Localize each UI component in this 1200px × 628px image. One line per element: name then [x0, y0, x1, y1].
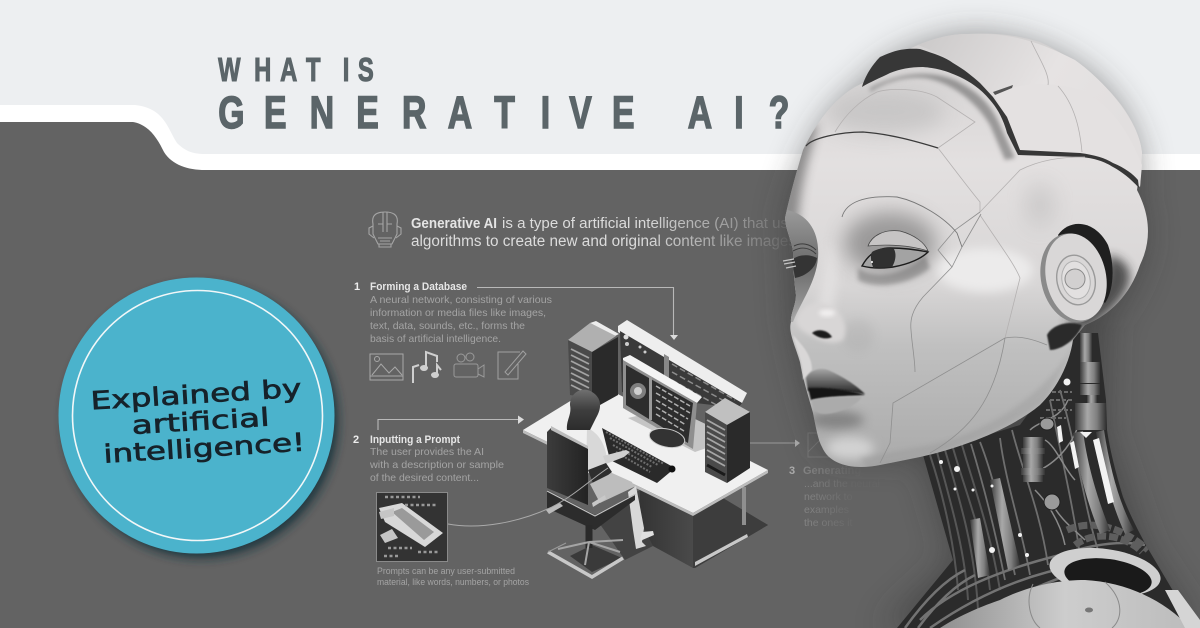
person hair: [567, 390, 600, 430]
chair base legs: [558, 540, 623, 565]
temple highlight: [937, 248, 1033, 292]
lower ear: [1047, 323, 1082, 350]
person: [567, 390, 654, 549]
keyboard: [602, 428, 676, 483]
mouth shade: [808, 411, 864, 429]
chair armrest: [546, 503, 563, 514]
nostril: [812, 330, 832, 338]
step 1: forming a database: [354, 281, 678, 383]
groove soft shadow: [870, 74, 1015, 160]
office chair: [546, 426, 636, 577]
back of head shade: [1065, 255, 1130, 330]
icon: video camera: [454, 353, 484, 377]
cap slit: [993, 85, 1013, 95]
desk top: [523, 384, 768, 513]
chair mat: [548, 552, 623, 577]
robot figure: [780, 34, 1200, 628]
shoulder plate: [940, 580, 1190, 628]
ear disc: [1032, 227, 1114, 329]
nose highlight: [819, 310, 835, 316]
intro text: is a type of artificial intelligence (AI) that uses: [502, 215, 804, 232]
callout line: thumbnail to keyboard: [448, 468, 608, 526]
badge text: artificial: [131, 403, 270, 440]
cap lower panel: [993, 84, 1142, 187]
step 2 description: with a description or sample: [369, 459, 504, 471]
person shirt: [586, 428, 607, 478]
top skull cap: [918, 34, 1142, 187]
large rear monitor: [618, 320, 747, 408]
desk leg: [742, 487, 746, 525]
step 2 number: 2: [353, 434, 359, 446]
desk pedestal: [640, 486, 693, 568]
nose body: [796, 303, 845, 343]
step 3 number: 3: [789, 465, 795, 477]
callout badge: [58, 278, 338, 558]
head base: [785, 34, 1148, 467]
left eye: [783, 244, 817, 278]
step 3 text: [803, 465, 880, 529]
thumbnail: keyboard close-up: [376, 492, 448, 562]
arrow: tower to step 3: [737, 440, 800, 447]
person skirt: [588, 463, 612, 486]
person lap: [590, 473, 634, 503]
person leg: [628, 486, 646, 549]
icon: music notes: [413, 352, 441, 383]
temple shade: [1025, 186, 1055, 224]
step 3 text: Generating: [803, 465, 861, 477]
step 3 text: the ones it: [804, 517, 853, 529]
robot neck mechanics: [890, 330, 1200, 628]
step 2 heading: Inputting a Prompt: [370, 434, 460, 446]
iris: [871, 248, 895, 268]
step 1 description: information or media files like images,: [370, 307, 546, 319]
step 3 text: examples: [804, 504, 849, 516]
desk edge: [523, 430, 768, 516]
isometric workstation illustration: [448, 320, 768, 577]
intro text: algorithms to create new and original content like images: [411, 233, 796, 250]
chin highlight: [826, 437, 874, 459]
upper lip: [806, 369, 865, 394]
caption: [377, 566, 529, 587]
person foot: [640, 531, 654, 541]
monitor stand: [648, 425, 686, 451]
step 3: generating content (faded): [737, 433, 880, 529]
hairline seam: [806, 132, 938, 148]
intro text: [411, 215, 804, 250]
step 2 description: The user provides the AI: [370, 446, 484, 458]
step 1 description: basis of artificial intelligence.: [370, 333, 501, 345]
white curved band: [0, 105, 1200, 200]
step 2 description: [369, 446, 504, 484]
forehead shade: [825, 90, 945, 134]
badge text: intelligence!: [103, 428, 306, 469]
eyeball: [862, 248, 928, 268]
lip line: [808, 388, 865, 400]
under eye shade: [858, 255, 930, 285]
shoulder rivet: [1085, 608, 1093, 612]
nose: [796, 303, 845, 343]
monitor shadow on desk: [628, 408, 735, 452]
neck pipes: [970, 333, 1134, 578]
nose side shade: [849, 325, 867, 342]
step 1 description: [370, 294, 552, 345]
arrow: step 1 to monitor: [477, 288, 678, 340]
face shading: [780, 90, 1130, 470]
chair floor shadow: [570, 545, 622, 572]
robot shoulder: [940, 541, 1200, 628]
eye socket shade: [844, 212, 936, 274]
desk foot bar: [695, 534, 748, 566]
right server tower: [705, 398, 750, 483]
eyelashes: [783, 259, 796, 268]
far cheek highlight: [793, 335, 812, 380]
neck joints: [1040, 418, 1060, 510]
title: [218, 52, 789, 138]
neck highlights: [939, 378, 1114, 557]
lower lip: [812, 397, 862, 414]
chair lower body: [547, 490, 635, 530]
server tower back: [568, 321, 619, 405]
right eye: [862, 231, 928, 268]
dark seam lines: [880, 212, 1047, 463]
badge ring: [72, 290, 322, 540]
badge disc: [58, 278, 334, 554]
step 1 description: A neural network, consisting of various: [370, 294, 552, 306]
caption: material, like words, numbers, or photos: [377, 577, 529, 587]
nose bridge highlight: [820, 265, 834, 305]
pedestal side: [693, 498, 768, 568]
ear knob: [1065, 269, 1085, 289]
title line: what is: WHAT IS: [218, 52, 374, 89]
far side of face: [785, 210, 818, 322]
step 1 description: text, data, sounds, etc., forms the: [370, 320, 525, 332]
icon: robot face: [369, 212, 401, 247]
badge text: Explained by: [90, 374, 302, 415]
face seam lines: [835, 41, 1085, 338]
step 2 description: of the desired content...: [370, 472, 479, 484]
icon: output picture: [808, 433, 832, 457]
floor shadow: [595, 488, 768, 568]
neck wiring: [905, 390, 1148, 628]
front monitor: [623, 355, 702, 449]
left edge shade: [780, 125, 818, 225]
chair column: [586, 525, 592, 548]
badge shadow: [64, 284, 338, 558]
person arm: [603, 450, 630, 464]
robot head: [780, 34, 1148, 470]
socket interior: [1062, 553, 1154, 601]
badge text: [90, 374, 306, 469]
icon: picture: [370, 354, 403, 380]
intro block: [369, 212, 804, 250]
jaw rim shade: [864, 368, 1060, 466]
right shoulder strut: [1165, 590, 1200, 628]
caption: Prompts can be any user-submitted: [377, 566, 515, 576]
icon: pen and paper: [498, 351, 526, 379]
chair back: [547, 427, 588, 505]
brow seam: [842, 197, 962, 247]
step 1 heading: Forming a Database: [370, 281, 467, 293]
shoulder socket: [1046, 541, 1164, 603]
dark groove under cap: [862, 49, 1139, 188]
title line: generative ai: GENERATIVE AI?: [218, 88, 789, 138]
lips: [806, 369, 865, 414]
intro text: Generative AI: [411, 216, 497, 232]
chair seat edge: [547, 491, 636, 516]
eye glint: [871, 261, 873, 263]
arrow: step 2 to desk: [378, 416, 524, 430]
ear inner ring: [1058, 259, 1094, 301]
step 2: inputting a prompt: [353, 416, 529, 587]
step 1 number: 1: [354, 281, 360, 293]
robot soft shadow: [785, 34, 1200, 628]
shoulder seams: [1029, 582, 1120, 628]
ear ring: [1052, 252, 1100, 308]
eyelid: [868, 231, 928, 251]
step 3 text: ...and the neural: [804, 478, 880, 490]
ear socket: [1058, 224, 1113, 303]
step 3 text: network to: [804, 491, 853, 503]
